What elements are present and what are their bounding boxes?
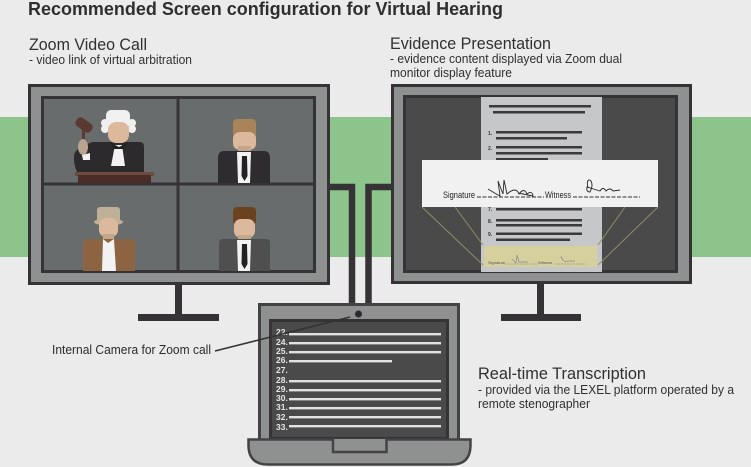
transcript line numbers: 31. — [276, 402, 288, 412]
figure: man in grey jacket — [219, 207, 270, 271]
monitor: Zoom video call — [30, 86, 328, 321]
transcript line numbers — [276, 327, 288, 432]
transcript line numbers: 26. — [276, 355, 288, 365]
webcam — [355, 310, 362, 318]
heading: Real-time Transcription: remote stenographer — [478, 397, 590, 411]
evidence document: 2. — [488, 146, 493, 152]
figure: man in brown jacket — [83, 207, 135, 271]
transcript line numbers: 27. — [276, 365, 288, 375]
transcript line numbers: 22. — [276, 327, 288, 337]
heading: Evidence Presentation: Evidence Presentation — [390, 35, 551, 53]
heading: Evidence Presentation — [390, 35, 622, 80]
heading: Zoom Video Call: Zoom Video Call — [29, 36, 147, 54]
laptop — [248, 304, 470, 464]
laptop screen — [270, 320, 448, 438]
callout: internal camera: Internal Camera for Zoom call — [52, 343, 211, 357]
green background band — [0, 117, 751, 257]
transcript line numbers: 29. — [276, 384, 288, 394]
zoom guide lines — [422, 207, 658, 265]
figure: man with tan hair — [218, 119, 270, 183]
transcript line numbers: 25. — [276, 346, 288, 356]
highlighted signature line: Witness — [538, 260, 552, 265]
transcript line numbers: 32. — [276, 412, 288, 422]
heading: Evidence Presentation: monitor display feature — [390, 66, 512, 80]
cables — [330, 187, 391, 304]
heading: Real-time Transcription: Real-time Transcription — [478, 365, 646, 383]
highlighted signature line: Signature — [488, 260, 506, 265]
enlarged signature panel: Witness — [545, 190, 571, 200]
transcript lines — [289, 333, 441, 427]
evidence document: 9. — [488, 232, 493, 238]
enlarged signature panel — [422, 160, 658, 207]
enlarged signature panel: Signature — [443, 190, 475, 200]
heading: Real-time Transcription — [478, 365, 734, 411]
evidence document: 8. — [488, 219, 493, 225]
evidence document: 1. — [488, 131, 493, 137]
heading: Real-time Transcription: - provided via the LEXEL platform operated by a — [478, 383, 734, 397]
heading: Evidence Presentation: - evidence content displayed via Zoom dual — [390, 52, 622, 66]
transcript line numbers: 33. — [276, 422, 288, 432]
laptop base — [248, 439, 470, 464]
figure: judge with gavel — [74, 110, 154, 183]
transcript line numbers: 30. — [276, 393, 288, 403]
evidence document: 7. — [488, 207, 493, 213]
heading: Zoom Video Call — [29, 36, 192, 67]
callout: internal camera — [52, 317, 350, 357]
heading: Zoom Video Call: - video link of virtual arbitration — [29, 53, 192, 67]
transcript line numbers: 24. — [276, 337, 288, 347]
transcript line numbers: 28. — [276, 375, 288, 385]
monitor: evidence presentation — [392, 86, 690, 321]
monitor stand — [138, 285, 219, 321]
evidence document — [481, 97, 602, 272]
highlighted signature line — [484, 246, 597, 267]
monitor stand — [501, 284, 581, 321]
